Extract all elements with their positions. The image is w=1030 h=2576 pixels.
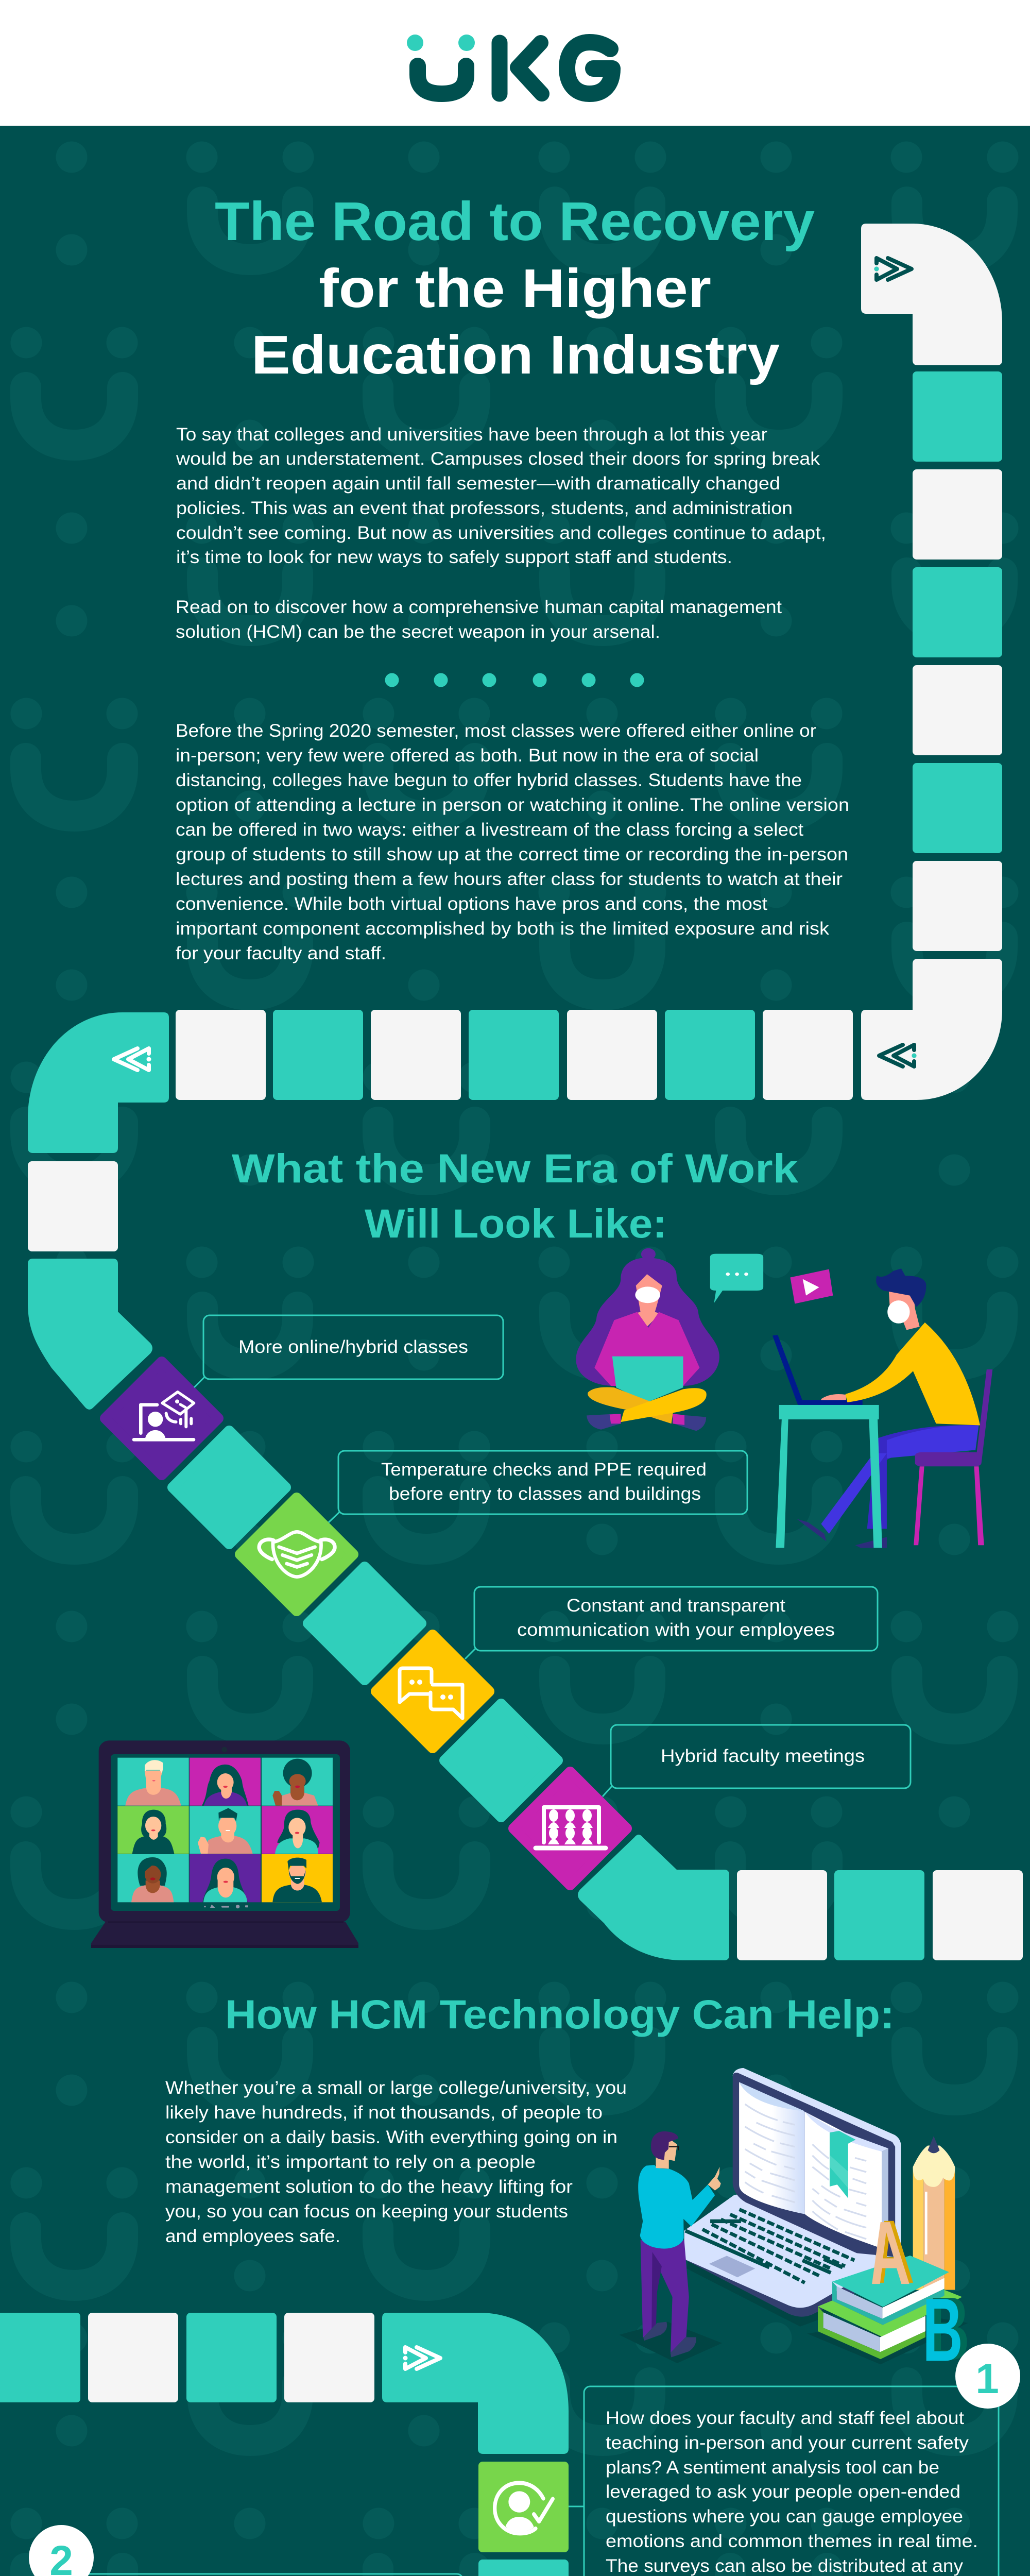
panel: step 1: leveraged to ask your people open-ended (606, 2482, 960, 2502)
hybrid classes paragraph: convenience. While both virtual options have pros and cons, the most (176, 894, 767, 914)
heading: new era of work: What the New Era of Work (232, 1145, 799, 1191)
panel: step 2 (29, 2525, 478, 2576)
text: people management: and employees safe. (165, 2226, 340, 2246)
hybrid classes paragraph: can be offered in two ways: either a livestream of the class forcing a select (176, 820, 803, 840)
title: The Road to Recovery (215, 191, 815, 252)
intro paragraph: and didn’t reopen again until fall semester—with dramatically changed (176, 473, 780, 494)
text: people management: you, so you can focus on keeping your students (165, 2201, 568, 2222)
letter blocks: B (929, 2279, 969, 2379)
intro paragraph: couldn’t see coming. But now as universities and colleges continue to adapt, (176, 523, 826, 543)
callout: hybrid meetings (603, 1725, 911, 1797)
icon: mask (259, 1532, 335, 1577)
hybrid classes paragraph: in-person; very few were offered as both. But now in the era of social (176, 745, 759, 766)
header band (0, 0, 1030, 126)
text: people management: Whether you’re a small or large college/university, you (165, 2078, 627, 2098)
hybrid classes paragraph: option of attending a lecture in person or watching it online. The online version (176, 795, 849, 815)
callout: temperature checks: Temperature checks and PPE required (381, 1460, 707, 1480)
books (818, 2256, 962, 2359)
badge 2 (29, 2525, 94, 2576)
hybrid classes paragraph: Before the Spring 2020 semester, most classes were offered either online or (176, 721, 816, 741)
icon: chat bubbles (400, 1668, 462, 1718)
person 4 (132, 1810, 174, 1854)
callout: temperature checks: before entry to classes and buildings (389, 1484, 701, 1504)
heading: new era of work (232, 1145, 799, 1246)
hybrid classes paragraph: important component accomplished by both is the limited exposure and risk (176, 919, 830, 939)
heading: how hcm can help: How HCM Technology Can Help: (225, 1991, 895, 2037)
diamond: faculty meetings (513, 1772, 627, 1885)
panel: step 1: emotions and common themes in real time. (606, 2531, 978, 2551)
icon: video meeting (536, 1807, 606, 1848)
icon: teacher and graduation cap (134, 1392, 194, 1439)
hybrid classes paragraph: lectures and posting them a few hours after class for students to watch at their (176, 869, 843, 889)
intro paragraph: policies. This was an event that professors, students, and administration (176, 498, 793, 518)
pencil (913, 2136, 955, 2290)
toolbar (204, 1905, 248, 1908)
arrow: right bottom (879, 1045, 917, 1066)
illustration: woman with laptop (576, 1248, 719, 1431)
road: lower section (0, 2313, 1030, 2576)
diamond: online classes (105, 1362, 218, 1475)
arrow: upper corner (403, 2347, 440, 2369)
road: upper segments (28, 224, 1002, 1410)
callout: communication: Constant and transparent (566, 1596, 785, 1616)
callout: online classes (194, 1315, 503, 1387)
text: people management: management solution to do the heavy lifting for (165, 2177, 573, 2197)
hybrid classes paragraph: distancing, colleges have begun to offer hybrid classes. Students have the (176, 770, 802, 790)
panel: step 1: teaching in-person and your current safety (606, 2433, 969, 2453)
hybrid classes paragraph: group of students to still show up at the correct time or recording the in-person (176, 844, 848, 865)
arrow: top right (874, 258, 912, 280)
person 6 (275, 1810, 320, 1854)
man (638, 2131, 721, 2357)
panel: step 1: plans? A sentiment analysis tool can be (606, 2458, 939, 2478)
callout: online classes: More online/hybrid classes (238, 1337, 468, 1357)
intro paragraph (176, 425, 826, 642)
dot divider (385, 673, 644, 687)
letter blocks: A (864, 2202, 913, 2303)
badge 1 (955, 2344, 1020, 2409)
person 8 (202, 1859, 248, 1902)
arrow: left (114, 1048, 151, 1070)
letter blocks: A (867, 2201, 916, 2302)
illustration: man with laptop and books (619, 2068, 969, 2380)
road: diagonal with icons (105, 1362, 1023, 1960)
panel: step 1: The surveys can also be distributed at any (606, 2556, 964, 2576)
person 9 (272, 1858, 322, 1902)
person 2 (202, 1765, 249, 1806)
hybrid classes paragraph (176, 721, 849, 963)
intro paragraph: To say that colleges and universities have been through a lot this year (176, 425, 767, 445)
callout: hybrid meetings: Hybrid faculty meetings (661, 1746, 865, 1766)
tile: sentiment (478, 2462, 569, 2552)
person 1 (125, 1760, 181, 1806)
road corner: left (28, 1012, 169, 1153)
icon: chat bubble (710, 1254, 763, 1303)
letter blocks (864, 2201, 969, 2380)
illustration: man at desk (772, 1268, 992, 1548)
title: for the Higher (319, 258, 711, 319)
heading: new era of work: Will Look Like: (365, 1200, 667, 1246)
title (215, 191, 815, 385)
road corner: upper (382, 2313, 569, 2454)
text: people management: the world, it’s important to rely on a people (165, 2152, 536, 2172)
text: people management (165, 2078, 627, 2246)
intro paragraph: would be an understatement. Campuses closed their doors for spring break (176, 449, 820, 469)
callout: temperature checks (329, 1451, 747, 1522)
letter blocks: B (922, 2280, 963, 2380)
icon: person with check (495, 2483, 553, 2533)
icon: video play (790, 1269, 833, 1304)
callout: communication: communication with your employees (517, 1620, 835, 1640)
panel: step 1 (569, 2344, 1020, 2576)
title: Education Industry (251, 325, 780, 385)
panel: step 1: How does your faculty and staff feel about (606, 2408, 964, 2428)
text: people management: consider on a daily basis. With everything going on in (165, 2127, 617, 2147)
callout: communication (465, 1587, 878, 1659)
diamond: communication (376, 1635, 489, 1748)
illustration: laptop video call (91, 1740, 358, 1948)
diamond: face mask (240, 1498, 353, 1611)
badge 1: 1 (975, 2355, 999, 2402)
road corner: right bottom (861, 959, 1002, 1100)
panel: step 1: questions where you can gauge employee (606, 2506, 963, 2527)
logo (407, 35, 612, 94)
hybrid classes paragraph: for your faculty and staff. (176, 943, 386, 963)
intro paragraph: it’s time to look for new ways to safely support staff and students. (176, 547, 732, 567)
text: people management: likely have hundreds, if not thousands, of people to (165, 2103, 603, 2123)
intro paragraph: solution (HCM) can be the secret weapon in your arsenal. (176, 622, 660, 642)
road corner: top right (861, 224, 1002, 365)
person 3 (272, 1759, 318, 1806)
intro paragraph: Read on to discover how a comprehensive human capital management (176, 597, 782, 617)
person 5 (198, 1808, 253, 1854)
person 7 (131, 1857, 174, 1902)
